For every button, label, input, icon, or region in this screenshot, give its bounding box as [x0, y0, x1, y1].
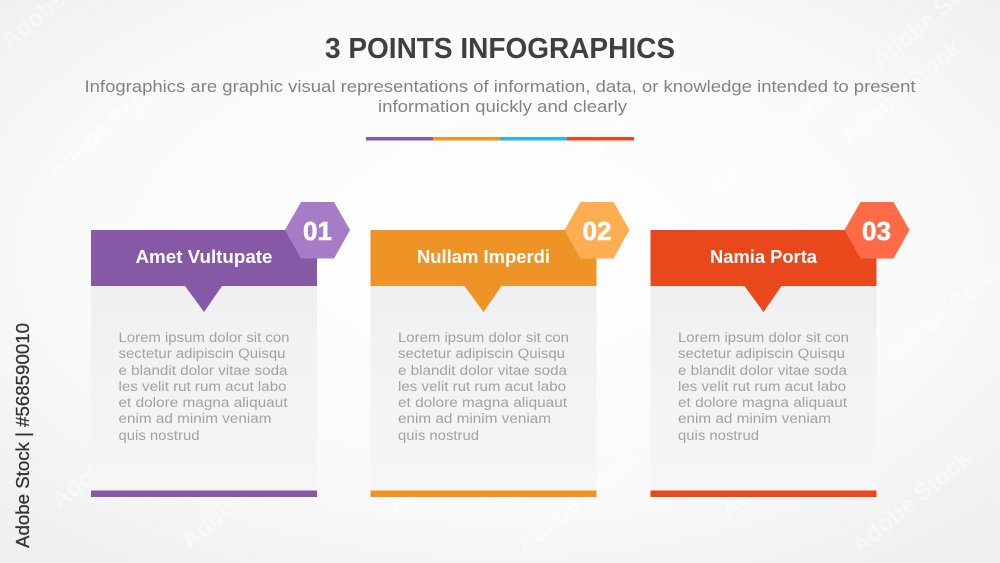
hexagon badge — [285, 202, 350, 258]
body text — [118, 330, 290, 443]
text: Adobe Stock — [502, 114, 632, 230]
body text: Lorem ipsum dolor sit con — [398, 330, 569, 345]
header banner — [370, 230, 596, 286]
body text: Lorem ipsum dolor sit con — [678, 330, 849, 345]
body text: et dolore magna aliquaut — [118, 395, 288, 410]
card body — [91, 286, 317, 491]
stock credit: Adobe Stock | #568590010 — [13, 323, 33, 548]
badge number: 03 — [862, 216, 891, 246]
body text: quis nostrud — [678, 428, 759, 443]
text: Adobe Stock — [172, 104, 302, 220]
subtitle: information quickly and clearly — [378, 97, 628, 116]
title divider — [366, 137, 634, 140]
body text: et dolore magna aliquaut — [678, 395, 847, 410]
text: Adobe Stock — [707, 84, 837, 200]
text: Adobe Stock — [372, 74, 502, 190]
panel: point 01 — [91, 202, 350, 497]
subtitle — [84, 77, 916, 116]
text: Adobe Stock — [512, 444, 642, 560]
body text: sectetur adipiscin Quisqu — [678, 346, 845, 361]
body text: Lorem ipsum dolor sit con — [118, 330, 290, 345]
title: 3 POINTS INFOGRAPHICS — [325, 33, 675, 65]
body text — [678, 330, 849, 443]
body text: enim ad minim veniam — [678, 411, 831, 426]
body text: e blandit dolor vitae soda — [678, 363, 848, 378]
subtitle: Infographics are graphic visual representations of information, data, or knowledge intended to present — [84, 77, 916, 96]
body text: sectetur adipiscin Quisqu — [118, 346, 286, 361]
badge number: 01 — [303, 216, 332, 246]
bottom bar — [650, 490, 876, 497]
text: Adobe Stock — [47, 399, 177, 515]
text: Adobe Stock — [847, 444, 977, 560]
body text: les velit rut rum acut labo — [118, 379, 286, 394]
heading: Namia Porta — [710, 247, 818, 267]
heading: Amet Vultupate — [136, 247, 272, 267]
body text: quis nostrud — [118, 428, 200, 443]
card body — [370, 286, 596, 491]
body text: enim ad minim veniam — [398, 411, 551, 426]
text: Adobe Stock — [382, 404, 512, 520]
card body — [650, 286, 876, 491]
body text: les velit rut rum acut labo — [678, 379, 846, 394]
hexagon badge — [844, 202, 910, 258]
body text: les velit rut rum acut labo — [398, 379, 566, 394]
bottom bar — [91, 490, 317, 497]
body text: e blandit dolor vitae soda — [398, 363, 568, 378]
body text: et dolore magna aliquaut — [398, 395, 567, 410]
body text: quis nostrud — [398, 428, 479, 443]
body text: e blandit dolor vitae soda — [118, 363, 288, 378]
text: Adobe Stock — [837, 34, 967, 150]
hexagon badge — [564, 202, 630, 258]
text: Adobe Stock — [42, 69, 172, 185]
bottom bar — [370, 490, 596, 497]
text: Adobe Stock — [717, 409, 847, 525]
body text — [398, 330, 569, 443]
text: Adobe Stock — [177, 439, 307, 555]
body text: enim ad minim veniam — [118, 411, 272, 426]
panel: point 03 — [650, 202, 910, 497]
pointer — [185, 286, 222, 312]
pointer — [464, 286, 502, 312]
pointer — [744, 286, 782, 312]
body text: sectetur adipiscin Quisqu — [398, 346, 565, 361]
header banner — [91, 230, 317, 286]
panel: point 02 — [370, 202, 630, 497]
heading: Nullam Imperdi — [417, 247, 550, 267]
header banner — [650, 230, 876, 286]
badge number: 02 — [583, 216, 611, 246]
